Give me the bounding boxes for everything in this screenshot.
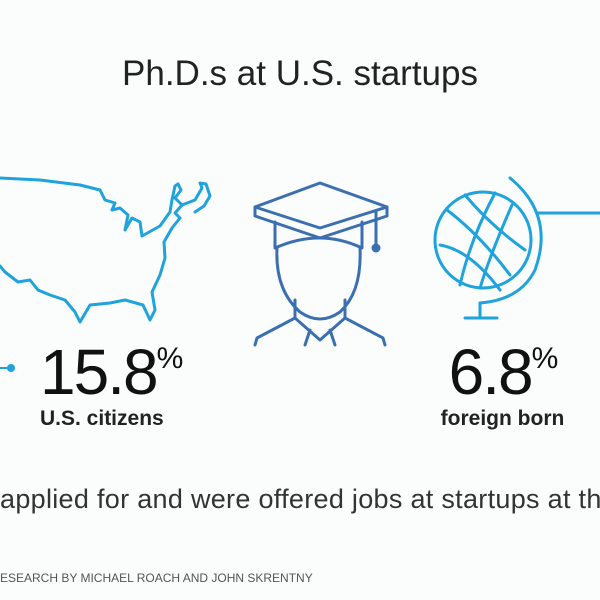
sentence: applied for and were offered jobs at startups at th bbox=[0, 484, 600, 514]
stat: foreign born bbox=[441, 336, 564, 430]
title: Ph.D.s at U.S. startups bbox=[122, 54, 478, 93]
icon: globe bbox=[435, 178, 600, 318]
footer credit: ESEARCH BY MICHAEL ROACH AND JOHN SKRENTNY bbox=[0, 571, 313, 585]
stat: US citizens: 15.8% bbox=[40, 336, 181, 408]
icon: US map bbox=[0, 178, 210, 322]
icon: graduate bbox=[255, 183, 387, 345]
stat: foreign born: 6.8% bbox=[449, 336, 556, 408]
stat: foreign born: foreign born bbox=[441, 407, 564, 430]
icon: dot connector bbox=[0, 364, 15, 372]
stat: US citizens: U.S. citizens bbox=[40, 407, 164, 430]
